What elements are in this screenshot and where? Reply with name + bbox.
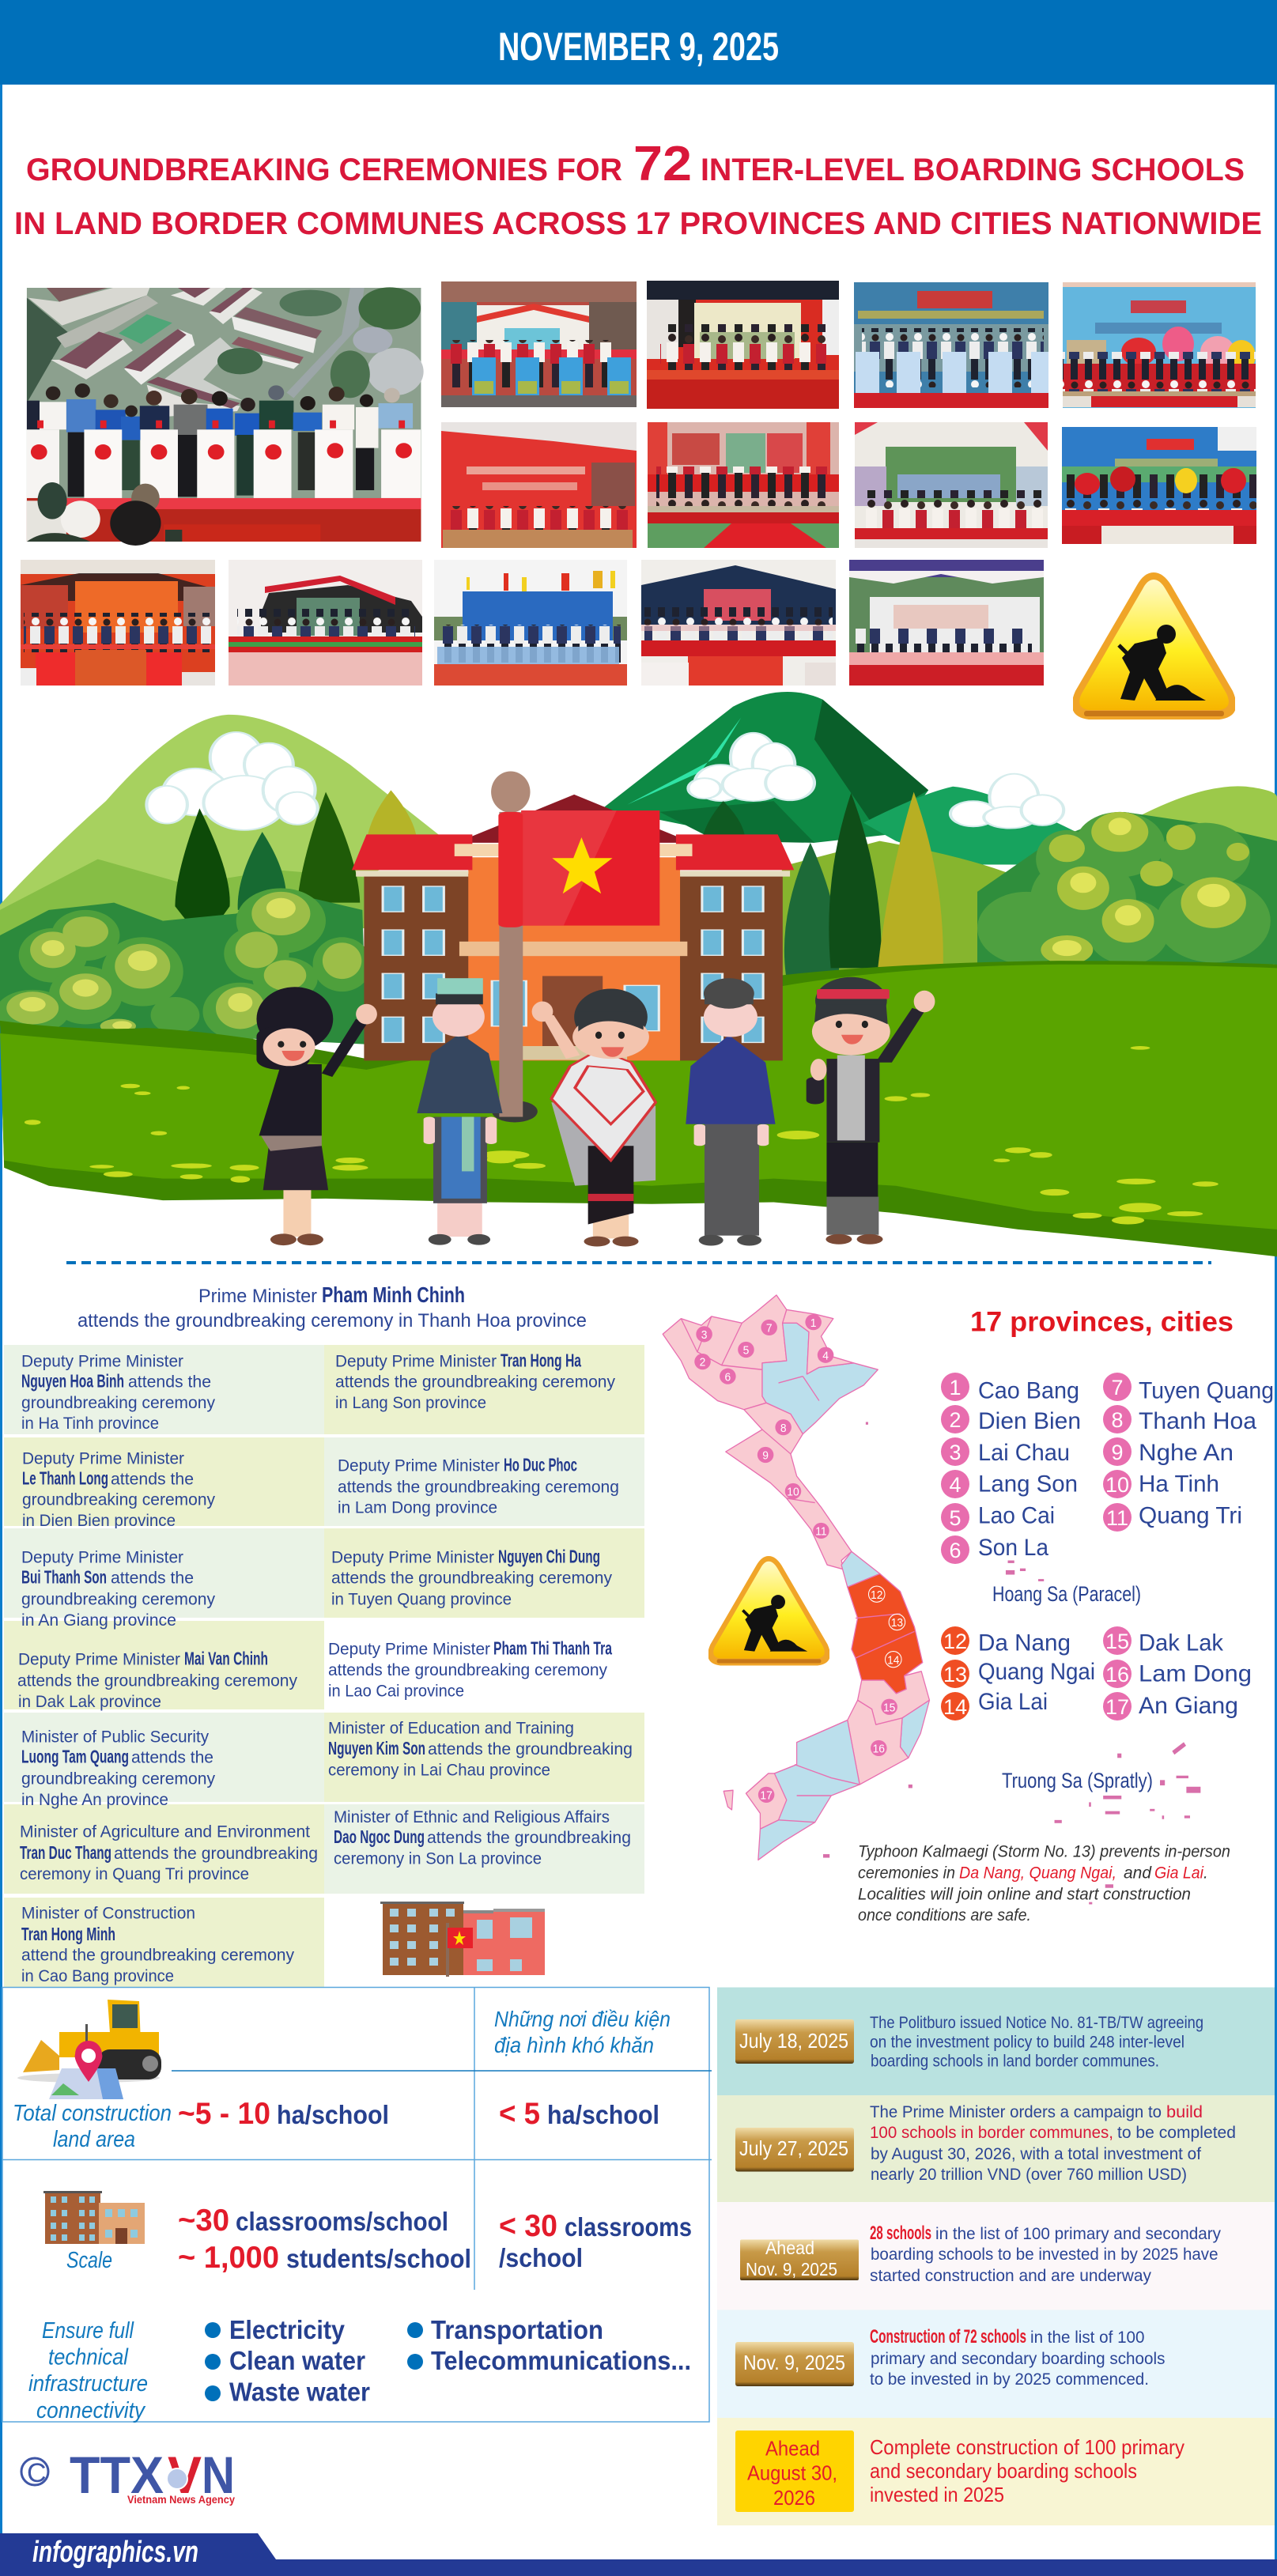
photo 2	[441, 281, 637, 407]
cell: Ho Duc Phoc: attends the groundbreaking ceremong	[338, 1478, 619, 1496]
icon: scale buildings	[43, 2191, 145, 2244]
timeline row: ahead of August 30, 2026: and secondary boarding schools	[870, 2459, 1137, 2483]
cell: Dao Ngoc Dung: Minister of Ethnic and Religious Affairs	[334, 1808, 610, 1826]
legend: provinces 1 to 11: 2	[949, 1408, 962, 1432]
cell: Pham Thi Thanh Tra: Pham Thi Thanh Tra	[493, 1638, 612, 1659]
row label: infrastructure: technical	[48, 2345, 129, 2370]
cell: Mai Van Chinh: attends the groundbreaking ceremony	[17, 1672, 297, 1690]
column heading: difficult terrain: Những nơi điều kiện	[494, 2007, 671, 2031]
cell: Le Thanh Long	[4, 1437, 324, 1530]
cell: Le Thanh Long: in Dien Bien province	[22, 1512, 176, 1530]
typhoon note: Gia Lai	[1154, 1864, 1204, 1882]
school standards table	[2, 1987, 712, 2423]
photo 10	[21, 560, 215, 686]
cell: Luong Tam Quang: attends the	[131, 1749, 213, 1767]
value: land area difficult terrain: ha/school	[547, 2100, 659, 2129]
map number markers: 12	[871, 1588, 882, 1602]
prime minister heading: Pham Minh Chinh	[322, 1282, 465, 1307]
copyright and agency logo: C	[27, 2458, 47, 2488]
timeline row: ahead of Nov. 9, 2025: Ahead	[765, 2238, 814, 2258]
cell: Tran Hong Minh: attend the groundbreaking ceremony	[21, 1946, 294, 1964]
timeline row: July 27, 2025: The Prime Minister orders a campaign to	[870, 2103, 1162, 2121]
cell: Nguyen Kim Son	[324, 1713, 644, 1802]
flag on pole	[491, 771, 659, 1122]
school building	[352, 795, 794, 1060]
footer band: infographics.vn	[32, 2536, 198, 2569]
map number markers: 14	[887, 1654, 899, 1667]
row label: infrastructure: infrastructure	[28, 2371, 148, 2397]
islands: Hoang Sa and Truong Sa	[823, 1422, 1200, 1904]
timeline row: July 27, 2025: July 27, 2025	[739, 2136, 848, 2160]
cell: Le Thanh Long: attends the	[111, 1471, 194, 1489]
value: scale standard: ~ 1,000	[178, 2241, 279, 2275]
legend: provinces 1 to 11: Ha Tinh	[1139, 1471, 1219, 1498]
cell: Tran Duc Thang	[4, 1804, 324, 1894]
timeline row: July 27, 2025	[717, 2095, 1275, 2202]
timeline row: July 18, 2025: July 18, 2025	[739, 2029, 848, 2053]
row label: scale: Scale	[66, 2248, 112, 2273]
character 1: woman in black	[256, 987, 377, 1245]
cell: Tran Duc Thang: Tran Duc Thang	[20, 1842, 111, 1863]
title: GROUNDBREAKING CEREMONIES FOR	[26, 153, 622, 187]
map number markers: 1	[810, 1316, 817, 1330]
row label: land area: land area	[53, 2127, 135, 2152]
infrastructure list	[205, 2315, 691, 2407]
legend: provinces 12 to 17: Gia Lai	[978, 1689, 1048, 1715]
character 4: man in blue shirt	[686, 978, 776, 1246]
cell: Tran Hong Minh	[4, 1898, 324, 1987]
footer band	[0, 2533, 1277, 2576]
timeline row: July 18, 2025	[717, 1988, 1275, 2095]
character 3: woman with white poncho	[532, 988, 656, 1246]
cell: Tran Duc Thang: ceremony in Quang Tri province	[20, 1865, 249, 1883]
value: scale standard: students/school	[286, 2244, 471, 2273]
cell: Bui Thanh Son: Deputy Prime Minister	[21, 1548, 183, 1566]
cell: Ho Duc Phoc: Ho Duc Phoc	[504, 1455, 577, 1475]
cell: Nguyen Hoa Binh: Nguyen Hoa Binh	[21, 1371, 124, 1392]
cell: Ho Duc Phoc	[324, 1437, 644, 1526]
legend: provinces 1 to 11: 5	[949, 1506, 962, 1530]
timeline	[717, 1988, 1275, 2525]
legend: provinces 12 to 17: 17	[1105, 1695, 1129, 1719]
photo: main ceremony with school render backdrop	[27, 287, 424, 546]
character 2: woman with turquoise hat	[417, 978, 503, 1245]
timeline row: Nov. 9, 2025: in the list of 100	[1030, 2329, 1145, 2347]
green ground	[0, 961, 1277, 1256]
cell: Tran Hong Ha: Tran Hong Ha	[501, 1350, 581, 1371]
cell: Bui Thanh Son: Bui Thanh Son	[21, 1566, 107, 1587]
legend: provinces 12 to 17: Lam Dong	[1139, 1661, 1252, 1687]
cell: Tran Hong Minh: Tran Hong Minh	[21, 1924, 115, 1944]
photo 14	[849, 560, 1044, 686]
legend: provinces 12 to 17: 16	[1105, 1663, 1129, 1686]
value: scale standard: classrooms/school	[236, 2207, 448, 2236]
cell: Le Thanh Long: groundbreaking ceremony	[22, 1491, 215, 1509]
cell: Pham Thi Thanh Tra	[328, 1638, 612, 1700]
timeline row: Nov. 9, 2025: primary and secondary boarding schools	[871, 2350, 1166, 2368]
value: scale difficult terrain: classrooms	[565, 2212, 692, 2242]
legend: provinces 12 to 17: 15	[1105, 1630, 1129, 1653]
cell: Tran Hong Minh: Minister of Construction	[21, 1905, 195, 1923]
cell: Nguyen Hoa Binh: attends the	[128, 1373, 211, 1392]
legend: provinces 1 to 11: 9	[1111, 1441, 1124, 1464]
cell: Bui Thanh Son	[4, 1528, 324, 1618]
timeline row: Nov. 9, 2025: to be invested in by 2025 commenced.	[870, 2370, 1149, 2389]
legend: provinces 12 to 17: An Giang	[1139, 1693, 1238, 1719]
legend: provinces 1 to 11: Cao Bang	[978, 1378, 1079, 1404]
infrastructure list: Electricity	[229, 2315, 346, 2344]
legend: provinces 12 to 17: Da Nang	[978, 1630, 1071, 1656]
cell: Nguyen Chi Dung: attends the groundbreaking ceremony	[331, 1569, 612, 1587]
text: An Giang line overlapping row edge: in An Giang province	[21, 1611, 176, 1630]
photo 7	[648, 422, 839, 548]
map number markers: 9	[762, 1449, 769, 1463]
cell: Le Thanh Long: Deputy Prime Minister	[22, 1450, 184, 1467]
photo 8	[855, 422, 1048, 548]
timeline row: July 18, 2025: boarding schools in land border communes.	[871, 2053, 1159, 2071]
timeline row: ahead of August 30, 2026: Ahead	[765, 2437, 820, 2461]
cell: Nguyen Chi Dung: Deputy Prime Minister	[331, 1548, 494, 1566]
cell: Nguyen Hoa Binh	[4, 1345, 324, 1434]
map number markers	[694, 1314, 905, 1803]
photo 13	[641, 560, 836, 686]
timeline row: ahead of August 30, 2026: 2026	[773, 2486, 815, 2510]
photo 3	[647, 281, 839, 409]
typhoon note: .	[1203, 1864, 1208, 1882]
icon: small roadwork warning sign	[708, 1556, 830, 1666]
cell: Tran Hong Ha: Deputy Prime Minister	[335, 1352, 497, 1371]
value: land area standard: ~5 - 10	[178, 2097, 270, 2131]
cell: Dao Ngoc Dung: attends the groundbreaking	[427, 1829, 631, 1847]
cell: Tran Hong Ha: attends the groundbreaking ceremony	[335, 1373, 615, 1392]
row label: land area: Total construction	[13, 2101, 172, 2126]
legend: provinces 1 to 11: 6	[949, 1539, 962, 1562]
timeline row: Nov. 9, 2025: Nov. 9, 2025	[743, 2351, 845, 2374]
legend: provinces 1 to 11: 1	[949, 1376, 962, 1399]
timeline row: July 18, 2025: on the investment policy to build 248 inter-level	[870, 2033, 1184, 2051]
map number markers: 16	[873, 1743, 885, 1756]
column heading: difficult terrain	[494, 2007, 671, 2057]
legend: provinces 1 to 11	[941, 1373, 1274, 1564]
background hills	[782, 786, 1277, 983]
title	[14, 137, 1262, 241]
map number markers: 11	[815, 1525, 827, 1539]
value: scale difficult terrain: < 30	[499, 2209, 557, 2243]
cell: Luong Tam Quang: Minister of Public Security	[21, 1728, 209, 1747]
copyright and agency logo: Vietnam News Agency	[127, 2493, 235, 2506]
icon: school buildings with flag	[380, 1902, 545, 1977]
legend: provinces 1 to 11: Lai Chau	[978, 1440, 1070, 1466]
character 5: man with red headband	[807, 977, 935, 1245]
cell: Luong Tam Quang: Luong Tam Quang	[21, 1747, 129, 1767]
right dark-green mountain	[603, 692, 1083, 864]
map number markers: 5	[743, 1344, 749, 1358]
typhoon note	[858, 1842, 1230, 1924]
timeline row: ahead of Nov. 9, 2025: boarding schools to be invested in by 2025 have	[871, 2246, 1218, 2264]
label: Hoang Sa: Hoang Sa (Paracel)	[992, 1582, 1141, 1606]
value: land area standard	[178, 2097, 389, 2131]
cell: Nguyen Chi Dung	[324, 1528, 644, 1618]
legend: provinces 12 to 17: Quang Ngai	[978, 1659, 1095, 1685]
cell: Nguyen Hoa Binh: groundbreaking ceremony	[21, 1394, 215, 1412]
photo 5	[1063, 282, 1256, 408]
legend: provinces 1 to 11: Lang Son	[978, 1471, 1078, 1498]
legend: provinces 1 to 11: 7	[1111, 1376, 1124, 1399]
value: scale standard: ~30	[178, 2204, 229, 2238]
typhoon note: Da Nang, Quang Ngai,	[959, 1864, 1116, 1882]
officials table	[4, 1345, 644, 1987]
value: land area difficult terrain	[499, 2097, 659, 2131]
cell: Ho Duc Phoc: in Lam Dong province	[338, 1498, 497, 1517]
photo 4	[854, 282, 1048, 408]
column heading: difficult terrain: địa hình khó khăn	[494, 2033, 654, 2057]
value: scale standard	[178, 2204, 471, 2275]
legend: provinces 1 to 11: Lao Cai	[978, 1502, 1055, 1528]
row label: infrastructure: Ensure full	[42, 2318, 134, 2344]
timeline row: July 27, 2025: nearly 20 trillion VND (over 760 million USD)	[871, 2166, 1187, 2184]
timeline row: Nov. 9, 2025: Construction of 72 schools	[870, 2326, 1026, 2347]
legend: provinces 1 to 11: Nghe An	[1139, 1440, 1234, 1466]
typhoon note: and	[1124, 1864, 1152, 1882]
timeline row: July 27, 2025: by August 30, 2026, with a total investment of	[871, 2145, 1201, 2163]
timeline row: July 27, 2025: 100 schools in border communes,	[870, 2124, 1113, 2142]
row label: infrastructure	[28, 2318, 148, 2423]
row label: land area	[13, 2101, 172, 2152]
timeline row: ahead of August 30, 2026: Complete construction of 100 primary	[870, 2435, 1184, 2459]
cell: Dao Ngoc Dung: Dao Ngoc Dung	[334, 1826, 425, 1847]
photo 11	[229, 560, 422, 686]
legend: provinces 1 to 11: 4	[949, 1473, 962, 1497]
typhoon note: once conditions are safe.	[858, 1906, 1031, 1924]
legend: provinces 12 to 17: 14	[943, 1695, 967, 1719]
timeline row: ahead of Nov. 9, 2025: 28 schools	[870, 2223, 931, 2244]
bushes left and right	[0, 888, 372, 1044]
value: land area difficult terrain: < 5	[499, 2097, 540, 2131]
map number markers: 13	[891, 1617, 903, 1630]
cell: Ho Duc Phoc: Deputy Prime Minister	[338, 1457, 500, 1475]
cell: Nguyen Kim Son: Nguyen Kim Son	[328, 1738, 425, 1758]
cell: Nguyen Kim Son: attends the groundbreaking	[428, 1740, 633, 1758]
photo 6	[441, 422, 637, 548]
cell: Luong Tam Quang	[4, 1713, 324, 1802]
legend: provinces 1 to 11: 10	[1105, 1473, 1129, 1497]
map number markers: 8	[780, 1422, 787, 1435]
legend: provinces 12 to 17: 13	[943, 1663, 967, 1686]
row label: infrastructure: connectivity	[36, 2398, 145, 2423]
timeline row: July 18, 2025: The Politburo issued Notice No. 81-TB/TW agreeing	[870, 2014, 1203, 2032]
prime minister heading: attends the groundbreaking ceremony in Thanh Hoa province	[77, 1310, 587, 1331]
icon: large roadwork warning sign	[1072, 572, 1236, 720]
legend: provinces 12 to 17: 12	[943, 1630, 967, 1653]
map number markers: 4	[822, 1350, 829, 1363]
header band with date	[0, 0, 1277, 85]
legend: provinces 1 to 11: Son La	[978, 1535, 1048, 1561]
map number markers: 7	[766, 1322, 773, 1335]
left light-green mountain	[0, 715, 440, 946]
cell: Dao Ngoc Dung	[324, 1804, 644, 1894]
value: scale difficult terrain: /school	[499, 2243, 583, 2272]
timeline row: ahead of Nov. 9, 2025	[717, 2202, 1275, 2310]
timeline row: ahead of August 30, 2026	[717, 2418, 1275, 2525]
legend: provinces 1 to 11: Dien Bien	[978, 1408, 1081, 1434]
copyright and agency logo	[21, 2446, 235, 2506]
typhoon note: ceremonies in	[858, 1864, 955, 1882]
cell: Nguyen Chi Dung: in Tuyen Quang province	[331, 1591, 512, 1609]
legend: provinces 1 to 11: 3	[949, 1441, 962, 1464]
cell: Pham Thi Thanh Tra: in Lao Cai province	[328, 1683, 464, 1700]
infrastructure list: Transportation	[431, 2315, 603, 2344]
map of Vietnam	[663, 1295, 1200, 1904]
infrastructure list: Waste water	[229, 2377, 370, 2407]
cell: Tran Duc Thang: attends the groundbreaking	[114, 1845, 318, 1863]
photo 9	[1062, 427, 1256, 544]
map number markers: 3	[701, 1328, 707, 1342]
map number markers: 17	[760, 1789, 773, 1803]
cell: Nguyen Hoa Binh: Deputy Prime Minister	[21, 1352, 183, 1371]
legend: provinces 1 to 11: Quang Tri	[1139, 1502, 1242, 1528]
legend: provinces 1 to 11: 11	[1106, 1506, 1128, 1530]
timeline row: ahead of August 30, 2026: invested in 2025	[870, 2483, 1004, 2506]
cell: Nguyen Kim Son: ceremony in Lai Chau province	[328, 1762, 550, 1779]
timeline row: ahead of Nov. 9, 2025: in the list of 100 primary and secondary	[935, 2225, 1221, 2243]
value: scale difficult terrain	[499, 2209, 692, 2272]
legend: provinces 12 to 17: Dak Lak	[1139, 1630, 1224, 1656]
legend: provinces 12 to 17	[941, 1626, 1252, 1720]
label: Truong Sa: Truong Sa (Spratly)	[1002, 1769, 1153, 1792]
cell: Bui Thanh Son: attends the	[111, 1569, 194, 1587]
cell: Dao Ngoc Dung: ceremony in Son La province	[334, 1850, 542, 1868]
timeline row: ahead of August 30, 2026: August 30,	[747, 2461, 837, 2484]
cell: Mai Van Chinh: in Dak Lak province	[18, 1693, 161, 1711]
cell: Luong Tam Quang: groundbreaking ceremony	[21, 1770, 215, 1788]
title: INTER-LEVEL BOARDING SCHOOLS	[701, 153, 1245, 187]
copyright and agency logo: N	[202, 2446, 235, 2504]
cell: Pham Thi Thanh Tra: Deputy Prime Minister	[328, 1641, 490, 1659]
copyright and agency logo: TTX	[70, 2446, 164, 2504]
typhoon note: Localities will join online and start construction	[858, 1885, 1191, 1903]
value: land area standard: ha/school	[277, 2100, 389, 2129]
timeline row: July 27, 2025: to be completed	[1117, 2124, 1236, 2142]
infrastructure list: Clean water	[229, 2346, 365, 2375]
cell: Nguyen Kim Son: Minister of Education and Training	[328, 1720, 574, 1738]
map number markers: 10	[787, 1486, 799, 1499]
map number markers: 2	[700, 1356, 705, 1369]
legend heading: 17 provinces, cities	[970, 1306, 1234, 1337]
cell: Mai Van Chinh: Deputy Prime Minister	[18, 1651, 180, 1668]
map number markers: 15	[883, 1702, 895, 1715]
typhoon note: Typhoon Kalmaegi (Storm No. 13) prevents in-person	[858, 1842, 1230, 1860]
cell: Bui Thanh Son: groundbreaking ceremony	[21, 1591, 215, 1609]
illustration: school, flag and ethnic community in the mountains	[0, 692, 1277, 1256]
legend: provinces 1 to 11: Thanh Hoa	[1139, 1408, 1256, 1434]
infrastructure list: Telecommunications...	[431, 2346, 691, 2375]
map number markers: 6	[725, 1371, 731, 1384]
cell: Nguyen Chi Dung: Nguyen Chi Dung	[498, 1546, 600, 1566]
title: IN LAND BORDER COMMUNES ACROSS 17 PROVINCES AND CITIES NATIONWIDE	[14, 206, 1262, 241]
legend: provinces 1 to 11: 8	[1111, 1408, 1124, 1432]
prime minister heading	[77, 1282, 587, 1331]
prime minister heading: Prime Minister	[198, 1286, 317, 1307]
cell: Tran Hong Ha	[324, 1345, 644, 1434]
header band with date: NOVEMBER 9, 2025	[498, 25, 779, 69]
text: Nghe An line overlapping row edge: in Nghe An province	[21, 1791, 168, 1809]
cell: Mai Van Chinh: Mai Van Chinh	[184, 1648, 268, 1668]
timeline row: July 27, 2025: build	[1166, 2103, 1203, 2121]
cell: Mai Van Chinh	[4, 1621, 324, 1711]
cell: Le Thanh Long: Le Thanh Long	[22, 1468, 108, 1489]
timeline row: ahead of Nov. 9, 2025: started construction and are underway	[870, 2267, 1151, 2285]
cell: Tran Hong Ha: in Lang Son province	[335, 1394, 486, 1412]
cell: Nguyen Hoa Binh: in Ha Tinh province	[21, 1415, 159, 1433]
copyright and agency logo: V	[168, 2446, 202, 2504]
clouds	[146, 732, 1064, 830]
icon: bulldozer and map pin	[17, 2000, 161, 2099]
cell: Tran Hong Minh: in Cao Bang province	[21, 1967, 174, 1985]
photo 12	[434, 560, 627, 686]
cell: Pham Thi Thanh Tra: attends the groundbreaking ceremony	[328, 1661, 607, 1679]
title: 72	[633, 137, 692, 191]
cell: Tran Duc Thang: Minister of Agriculture and Environment	[20, 1823, 310, 1841]
conifer trees	[175, 790, 943, 976]
timeline row: ahead of Nov. 9, 2025: Nov. 9, 2025	[746, 2259, 837, 2279]
timeline row: Nov. 9, 2025	[717, 2310, 1275, 2418]
